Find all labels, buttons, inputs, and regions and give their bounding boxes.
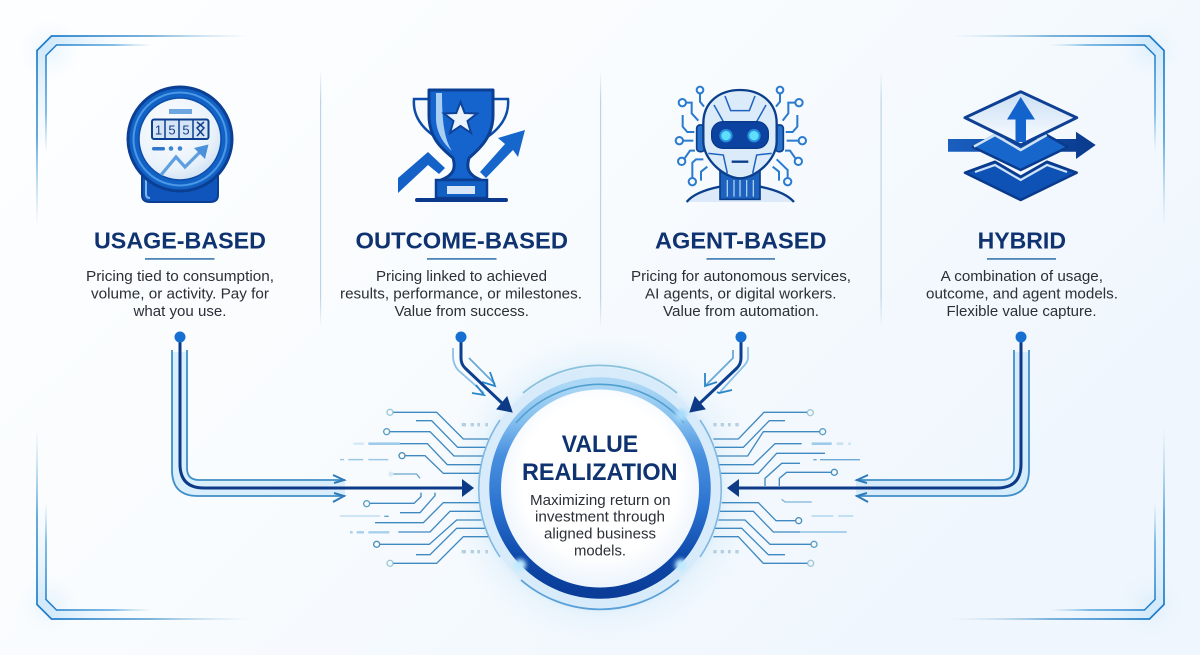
hub rings (479, 365, 721, 609)
hub description: Maximizing return on (530, 493, 670, 509)
hub title (522, 431, 678, 486)
icon: utility meter: 5 (168, 122, 176, 138)
hub description: models. (574, 544, 626, 560)
circuit traces: right (713, 410, 860, 566)
panel: usage-based (86, 87, 274, 320)
description: Pricing for autonomous services, (631, 269, 851, 285)
connector: usage-based to hub (172, 332, 474, 502)
description: what you use. (132, 304, 226, 320)
description: Flexible value capture. (946, 304, 1096, 320)
icon: robot head (676, 87, 806, 202)
icon: utility meter: 1 (155, 122, 162, 138)
panel: outcome-based (340, 90, 582, 320)
description (86, 269, 274, 320)
circuit traces: left (340, 409, 488, 566)
icon: utility meter: 5 (182, 122, 190, 138)
description (340, 269, 582, 320)
hub description: aligned business (544, 526, 656, 542)
connector: hybrid to hub (727, 332, 1029, 502)
description: Pricing linked to achieved (376, 269, 547, 285)
hub title: VALUE (562, 431, 638, 458)
icon: stacked layers with arrows (948, 92, 1096, 200)
icon: trophy with arrows (398, 90, 525, 202)
description: results, performance, or milestones. (340, 286, 582, 302)
description: Value from automation. (663, 304, 819, 320)
connector: outcome-based to hub (453, 332, 512, 412)
description (631, 269, 851, 320)
heading: OUTCOME-BASED (356, 228, 568, 254)
heading: USAGE-BASED (94, 228, 266, 254)
description: Pricing tied to consumption, (86, 269, 274, 285)
description: outcome, and agent models. (926, 286, 1118, 302)
value realization hub (479, 365, 721, 609)
connector: agent-based to hub (690, 332, 748, 412)
description: volume, or activity. Pay for (91, 286, 269, 302)
hub glow (440, 328, 760, 648)
panel: hybrid (926, 92, 1118, 320)
heading: AGENT-BASED (655, 228, 826, 254)
description: A combination of usage, (941, 269, 1103, 285)
description (926, 269, 1118, 320)
hub description: investment through (535, 510, 665, 526)
heading: HYBRID (978, 228, 1066, 254)
description: Value from success. (394, 304, 529, 320)
hub title: REALIZATION (522, 459, 678, 486)
icon: utility meter (128, 87, 232, 202)
panel: agent-based (631, 87, 851, 320)
hub description (530, 493, 670, 560)
description: AI agents, or digital workers. (645, 286, 836, 302)
